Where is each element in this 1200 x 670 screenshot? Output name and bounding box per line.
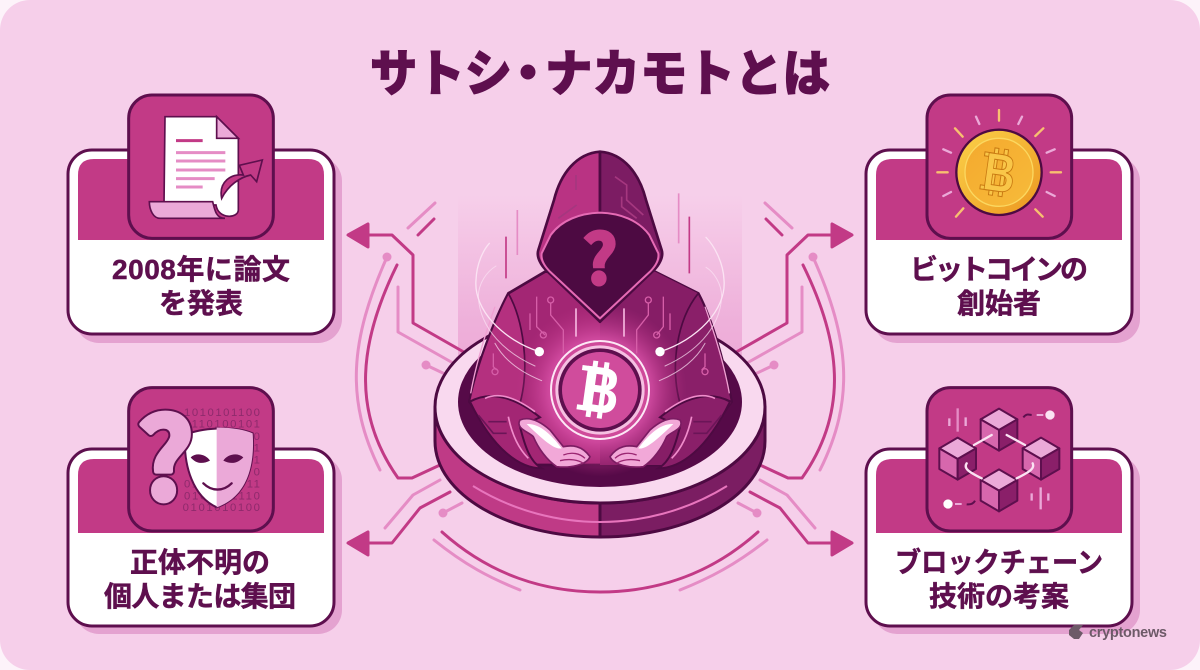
left arm <box>469 293 525 403</box>
top cube <box>981 409 1017 451</box>
icon: document <box>129 95 273 238</box>
binary digits: 0101010011 <box>184 478 260 490</box>
card body <box>68 449 334 626</box>
binary digits: 110100101 <box>192 419 260 431</box>
big question mark: ? <box>137 370 194 532</box>
coin <box>551 341 649 439</box>
label line 2: 技術の考案 <box>929 581 1069 612</box>
icon: blockchain <box>927 388 1072 531</box>
title: サトシ <box>370 46 512 102</box>
card band <box>78 159 324 240</box>
links <box>966 435 1033 478</box>
mask shape <box>185 428 253 507</box>
binary digits: 0 <box>254 431 260 443</box>
left cube <box>939 438 976 480</box>
card shadow <box>873 157 1140 343</box>
platform pit <box>458 317 742 487</box>
coin glow <box>513 303 687 477</box>
card: anonymous <box>68 370 342 634</box>
right cube <box>1023 438 1059 480</box>
connectors: right <box>731 203 852 555</box>
left sleeve <box>470 396 542 468</box>
card: creator of bitcoin <box>866 95 1140 343</box>
question mark: ? <box>582 205 618 304</box>
card shadow <box>873 456 1140 634</box>
binary digits: 0101010100 <box>183 502 260 514</box>
gold bitcoin symbol: B <box>980 141 1020 205</box>
glow behind figure <box>458 195 742 425</box>
motion arcs <box>476 237 724 381</box>
icon: gold coin <box>927 95 1072 238</box>
arm highlights <box>471 307 729 393</box>
label line 2: 個人または集団 <box>104 581 296 612</box>
platform side <box>435 407 600 537</box>
sleeve rims <box>485 396 715 458</box>
sleeve circuits <box>478 415 722 433</box>
label: 正体不明の <box>130 547 270 578</box>
card band <box>876 159 1122 240</box>
hooded figure <box>469 152 732 477</box>
binary digits: 1010101100 <box>184 407 260 419</box>
finger lines <box>560 453 640 463</box>
spark lines <box>506 193 689 278</box>
icon: mask <box>129 370 273 532</box>
binary digits: 1 <box>254 443 260 455</box>
platform top <box>435 311 765 503</box>
left hand <box>519 419 590 467</box>
circuit traces <box>492 297 708 375</box>
card: blockchain concept <box>866 388 1140 634</box>
card band <box>876 459 1122 533</box>
torso <box>469 272 732 465</box>
label: ビットコインの <box>910 254 1088 285</box>
card: 2008 paper <box>68 95 342 343</box>
title: ナカモトとは <box>545 46 830 102</box>
right sleeve <box>658 396 730 468</box>
card shadow <box>75 456 342 634</box>
bottom arcs <box>434 532 767 592</box>
card body <box>866 449 1132 626</box>
binary digits: 0 <box>254 467 260 479</box>
binary digits: 0101011110 <box>184 490 260 502</box>
connectors: left <box>348 203 469 555</box>
title: ・ <box>503 46 553 102</box>
label line 2: を発表 <box>159 288 243 319</box>
big question mark: ? <box>137 370 194 532</box>
right hand <box>610 419 681 467</box>
bottom cube <box>981 469 1017 511</box>
drawstrings <box>576 308 624 337</box>
hand highlights <box>527 424 673 449</box>
label: 2008年に論文 <box>112 254 290 285</box>
right arm <box>675 293 732 403</box>
hood details <box>558 175 643 218</box>
title <box>370 46 830 102</box>
face shadow <box>542 213 658 318</box>
hood left <box>538 152 600 322</box>
card band <box>78 459 324 533</box>
data nodes <box>1045 410 1055 420</box>
card shadow <box>75 157 342 343</box>
label line 2: 創始者 <box>957 288 1041 319</box>
label: ブロックチェーン <box>895 546 1103 578</box>
card body <box>68 150 334 334</box>
binary digits: 1 <box>254 454 260 466</box>
hood right <box>600 152 662 322</box>
logo: cryptonews: cryptonews <box>1089 625 1167 641</box>
glowing dots <box>535 347 665 356</box>
card body <box>866 150 1132 334</box>
bitcoin symbol: B <box>577 351 625 429</box>
platform <box>435 311 765 537</box>
binary digits <box>183 407 260 514</box>
